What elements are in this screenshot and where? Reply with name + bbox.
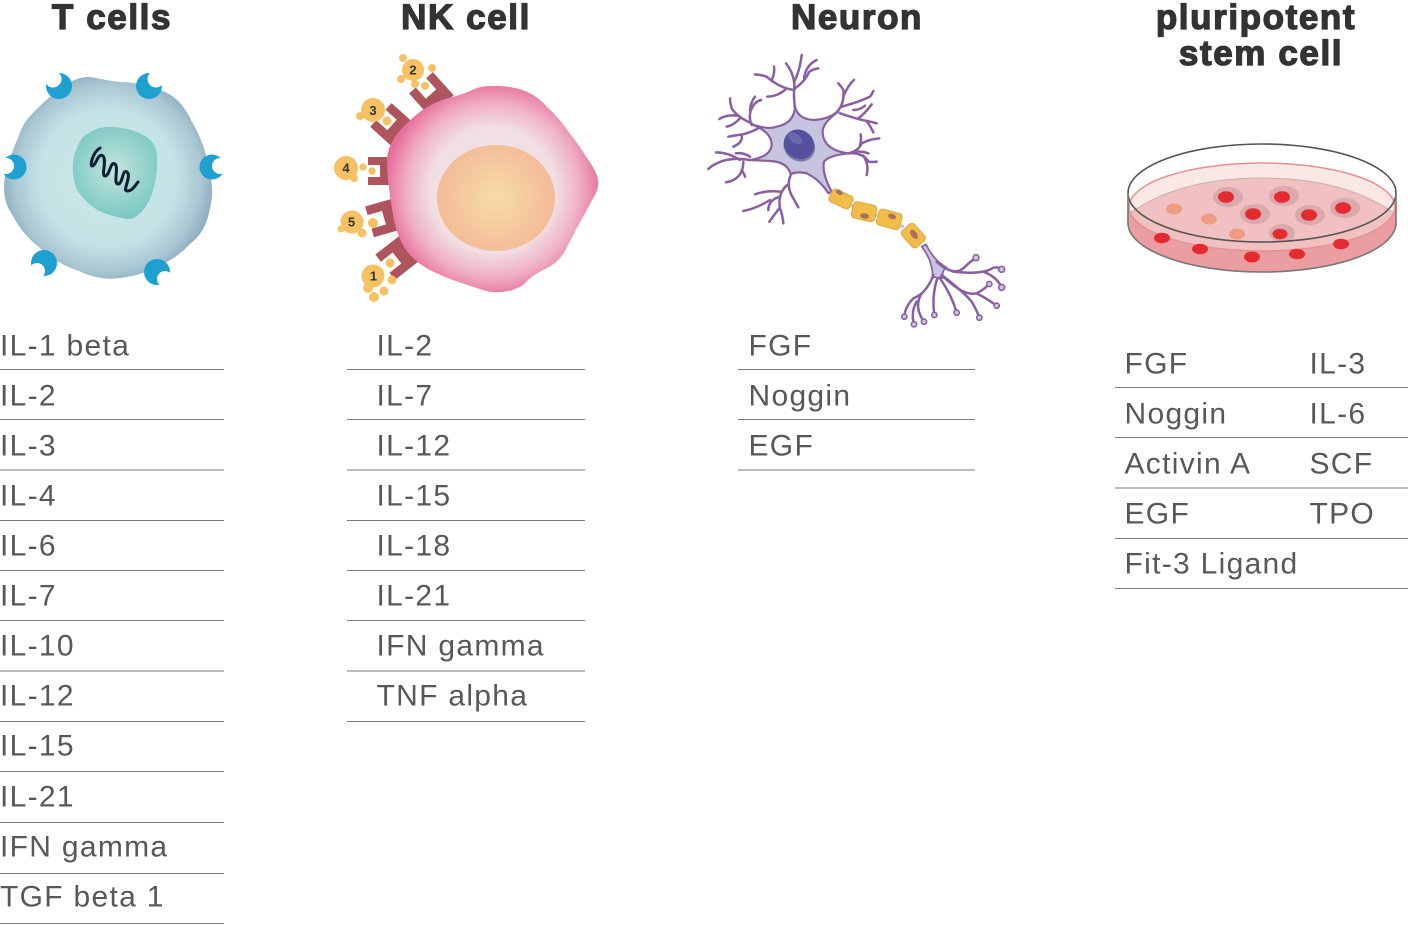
list: NK cell: IL-2 — [376, 330, 433, 362]
list: pluripotent stem cell: IL-3 — [1310, 348, 1366, 380]
soma nucleus — [778, 125, 821, 168]
icon: NK cell: 4 — [342, 160, 350, 176]
list: Neuron: EGF — [748, 430, 814, 462]
list: pluripotent stem cell — [1115, 348, 1408, 588]
soma — [750, 107, 848, 193]
icon: NK cell: 5 — [348, 214, 355, 230]
list: T cells: TGF beta 1 — [0, 880, 165, 914]
list: T cells: IL-3 — [0, 430, 57, 462]
list: T cells: IL-7 — [0, 580, 57, 612]
list: Neuron — [738, 330, 975, 470]
icon: NK cell — [334, 54, 598, 302]
axon terminal — [902, 244, 1005, 327]
list: NK cell: IL-15 — [376, 480, 451, 512]
axon nodes — [852, 205, 903, 228]
list: T cells: IL-4 — [0, 480, 57, 512]
list: pluripotent stem cell: Noggin — [1124, 398, 1227, 430]
cells — [1213, 186, 1360, 242]
list: T cells: IL-15 — [0, 730, 75, 762]
icon: NK cell: 1 — [370, 268, 377, 284]
dish rim — [1128, 144, 1396, 272]
list: pluripotent stem cell: TPO — [1310, 498, 1375, 530]
list: pluripotent stem cell: Fit-3 Ligand — [1124, 548, 1299, 580]
list: T cells: IL-2 — [0, 380, 57, 412]
receptors — [46, 73, 72, 99]
title: pluripotent stem cell: stem cell — [1179, 34, 1343, 73]
title: pluripotent stem cell — [1156, 0, 1356, 73]
list: NK cell: IFN gamma — [376, 630, 545, 662]
list: NK cell: TNF alpha — [376, 680, 528, 712]
icon: DNA squiggle — [91, 148, 138, 191]
icon: NK cell: 2 — [409, 62, 417, 78]
list: Neuron: Noggin — [748, 380, 851, 412]
list: NK cell: IL-21 — [376, 580, 451, 612]
list: T cells: IL-1 beta — [0, 330, 130, 362]
list: NK cell — [347, 330, 585, 722]
icon: NK cell: 3 — [369, 103, 377, 118]
list: pluripotent stem cell: IL-6 — [1310, 398, 1366, 430]
list: pluripotent stem cell: Activin A — [1124, 448, 1251, 480]
list: T cells: IL-6 — [0, 530, 57, 562]
list: NK cell: IL-7 — [376, 380, 433, 412]
list: T cells: IL-10 — [0, 630, 75, 662]
list: NK cell: IL-12 — [376, 430, 451, 462]
list: pluripotent stem cell: FGF — [1124, 348, 1188, 380]
icon: T cell — [0, 70, 228, 287]
icon: neuron — [708, 55, 1005, 327]
list: T cells: IFN gamma — [0, 830, 168, 864]
list: T cells: IL-21 — [0, 780, 75, 814]
list: pluripotent stem cell: SCF — [1310, 448, 1373, 480]
dendrites — [708, 55, 879, 223]
list: Neuron: FGF — [748, 330, 812, 362]
list: T cells — [0, 330, 224, 924]
list: NK cell: IL-18 — [376, 530, 451, 562]
list: T cells: IL-12 — [0, 680, 75, 712]
icon: petri dish — [1128, 144, 1396, 272]
Schwann cells — [828, 188, 854, 210]
list: pluripotent stem cell: EGF — [1124, 498, 1190, 530]
